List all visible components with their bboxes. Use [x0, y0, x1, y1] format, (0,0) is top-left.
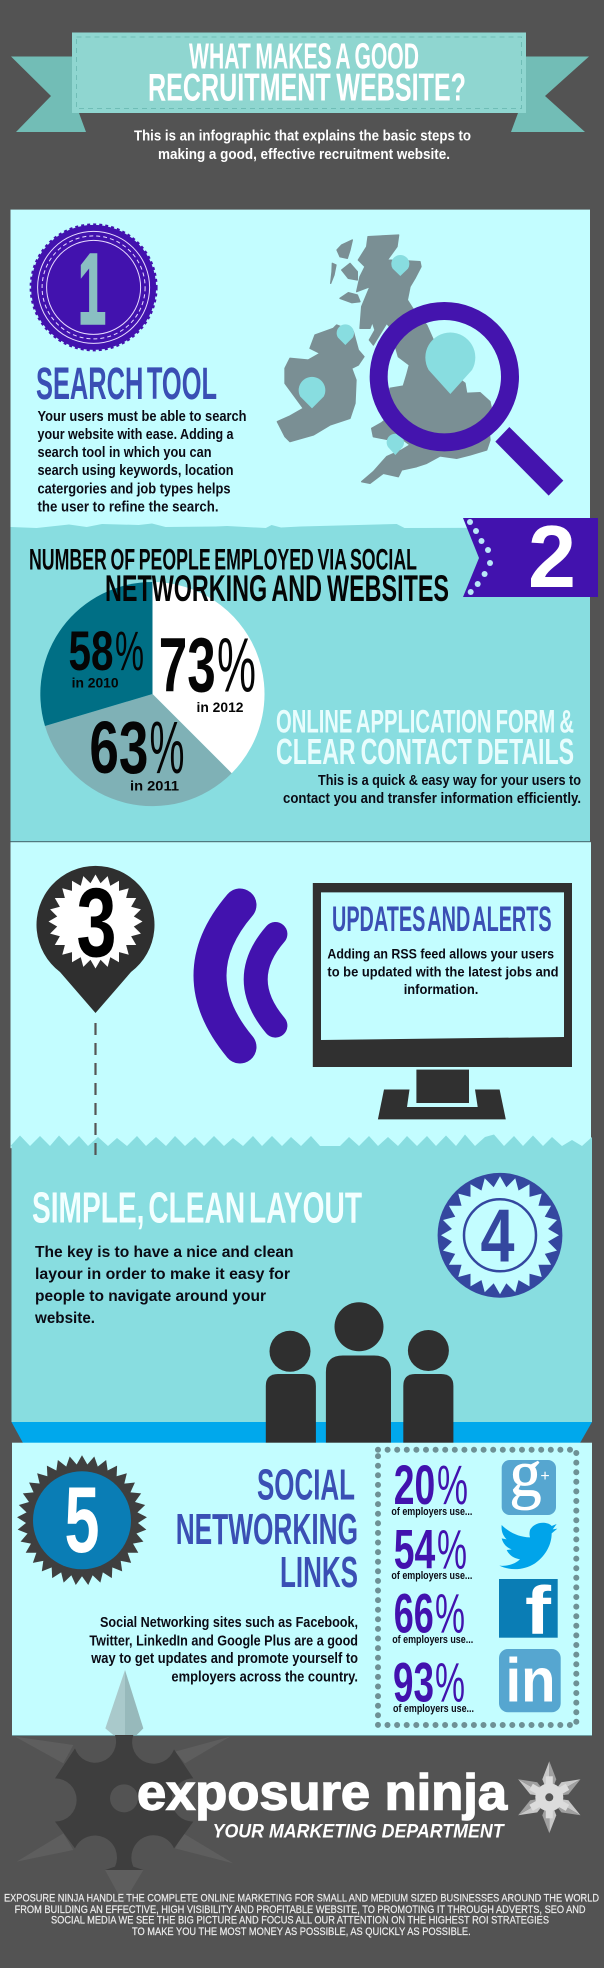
body text: employers across the country.	[171, 1669, 358, 1685]
title	[148, 36, 466, 110]
body text: Your users must be able to search	[38, 409, 246, 425]
body text: people to navigate around your	[35, 1288, 266, 1305]
panel: step 1 search tool	[10, 210, 590, 532]
stat 58%: in 2010	[72, 675, 119, 691]
heading: search tool: SEARCH TOOL	[36, 358, 217, 409]
logo: exposure ninja	[137, 1765, 508, 1843]
stat 66%: %	[435, 1582, 465, 1644]
stat 54%: of employers use...	[391, 1570, 472, 1582]
dashed connector from pin 3	[94, 1023, 97, 1156]
stat 54%: %	[437, 1518, 467, 1580]
icon: linkedin: in	[506, 1647, 556, 1716]
icon: google plus: g	[510, 1437, 542, 1511]
body text: contact you and transfer information efficiently.	[283, 791, 581, 807]
monitor body text: to be updated with the latest jobs and	[327, 964, 559, 980]
footer text	[4, 1893, 599, 1938]
stat 66%: of employers use...	[392, 1634, 473, 1646]
badge 4: 4	[480, 1194, 515, 1278]
stat 73%: in 2012	[196, 699, 244, 715]
icon: facebook	[499, 1572, 558, 1648]
pie chart	[40, 582, 265, 806]
magnifying glass	[379, 311, 563, 496]
banner with number 2: 2	[528, 507, 576, 606]
heading: online application	[276, 704, 574, 772]
body text: The key is to have a nice and clean	[35, 1244, 294, 1261]
stat 63%: %	[150, 706, 184, 789]
logo: exposure ninja: exposure ninja	[137, 1765, 508, 1821]
icon: shuriken logo	[515, 1761, 584, 1833]
heading: simple clean layout: SIMPLE, CLEAN LAYOUT	[32, 1184, 362, 1233]
banner with number 2	[463, 507, 598, 606]
monitor	[313, 883, 572, 1119]
location pins	[299, 255, 475, 455]
badge 5	[17, 1434, 168, 1595]
badge 1: 1	[78, 234, 106, 346]
stat 54%: 54	[394, 1518, 435, 1580]
body text: your website with ease. Adding a	[38, 427, 234, 443]
badge 5: 5	[64, 1467, 100, 1572]
body text	[34, 1244, 293, 1327]
stat 63%: in 2011	[130, 778, 179, 794]
icon: three people	[266, 1302, 453, 1443]
stat 58%: %	[115, 619, 144, 682]
intro text: This is an infographic that explains the basic steps to	[134, 129, 471, 145]
footer text: TO MAKE YOU THE MOST MONEY AS POSSIBLE, AS QUICKLY AS POSSIBLE.	[132, 1926, 471, 1938]
stat 20%: 20	[394, 1453, 435, 1516]
header ribbon with title	[11, 32, 589, 132]
panel: step 5 social networking links	[12, 1434, 592, 1736]
icon: facebook: f	[525, 1572, 551, 1648]
body text: way to get updates and promote yourself to	[90, 1651, 358, 1667]
stat 58%: 58	[68, 619, 114, 682]
body text	[283, 773, 581, 807]
heading: social networking links: LINKS	[280, 1548, 358, 1597]
blue floor band	[12, 1422, 592, 1443]
stat 93%: %	[435, 1650, 465, 1713]
body text: search using keywords, location	[38, 463, 234, 479]
heading: social networking links: SOCIAL	[257, 1461, 355, 1510]
stat 73%: %	[217, 623, 256, 709]
icon: twitter bird	[499, 1523, 557, 1569]
heading: social networking links: NETWORKING	[176, 1505, 358, 1554]
body text: search tool in which you can	[38, 445, 212, 461]
map pin badge 3	[37, 859, 158, 1013]
icon: google plus: +	[540, 1468, 550, 1485]
stat 93%: 93	[393, 1650, 434, 1713]
stat 93%: of employers use...	[393, 1703, 474, 1715]
footer watermark shuriken	[15, 1670, 233, 1903]
icon: RSS waves	[210, 905, 275, 1047]
tagline: YOUR MARKETING DEPARTMENT	[213, 1821, 505, 1843]
panel: step 3 updates and alerts	[10, 842, 591, 1148]
panel: step 4 simple clean layout	[10, 1134, 592, 1443]
badge 1	[31, 225, 156, 350]
map of UK and Ireland with magnifier	[277, 235, 563, 496]
monitor body text: Adding an RSS feed allows your users	[327, 946, 554, 962]
badge 4	[438, 1157, 578, 1300]
title: WHAT MAKES A GOOD	[189, 36, 419, 77]
monitor body text	[327, 946, 559, 997]
body text: layour in order to make it easy for	[35, 1266, 290, 1283]
body text: Social Networking sites such as Facebook,	[100, 1615, 358, 1631]
body text: catergories and job types helps	[38, 482, 230, 498]
intro text	[134, 129, 471, 163]
dotted stats frame	[378, 1450, 576, 1725]
chart heading	[29, 543, 449, 609]
stat 20%: %	[437, 1453, 468, 1516]
body text: website.	[34, 1310, 95, 1327]
body text: the user to refine the search.	[38, 500, 218, 516]
body text: Twitter, LinkedIn and Google Plus are a good	[89, 1633, 358, 1649]
heading: social networking links	[176, 1461, 358, 1597]
stat 66%: 66	[394, 1582, 434, 1644]
body text	[89, 1615, 358, 1685]
map pin badge 3: 3	[76, 868, 116, 978]
monitor body text: information.	[404, 981, 478, 997]
stat 63%: 63	[89, 706, 148, 789]
intro text: making a good, effective recruitment website.	[158, 147, 450, 163]
stat 20%: of employers use...	[391, 1506, 472, 1518]
icon: google plus	[502, 1437, 556, 1515]
body text	[38, 409, 246, 516]
panel: step 2 online application and statistics	[10, 507, 598, 842]
stat 73%: 73	[159, 623, 216, 709]
